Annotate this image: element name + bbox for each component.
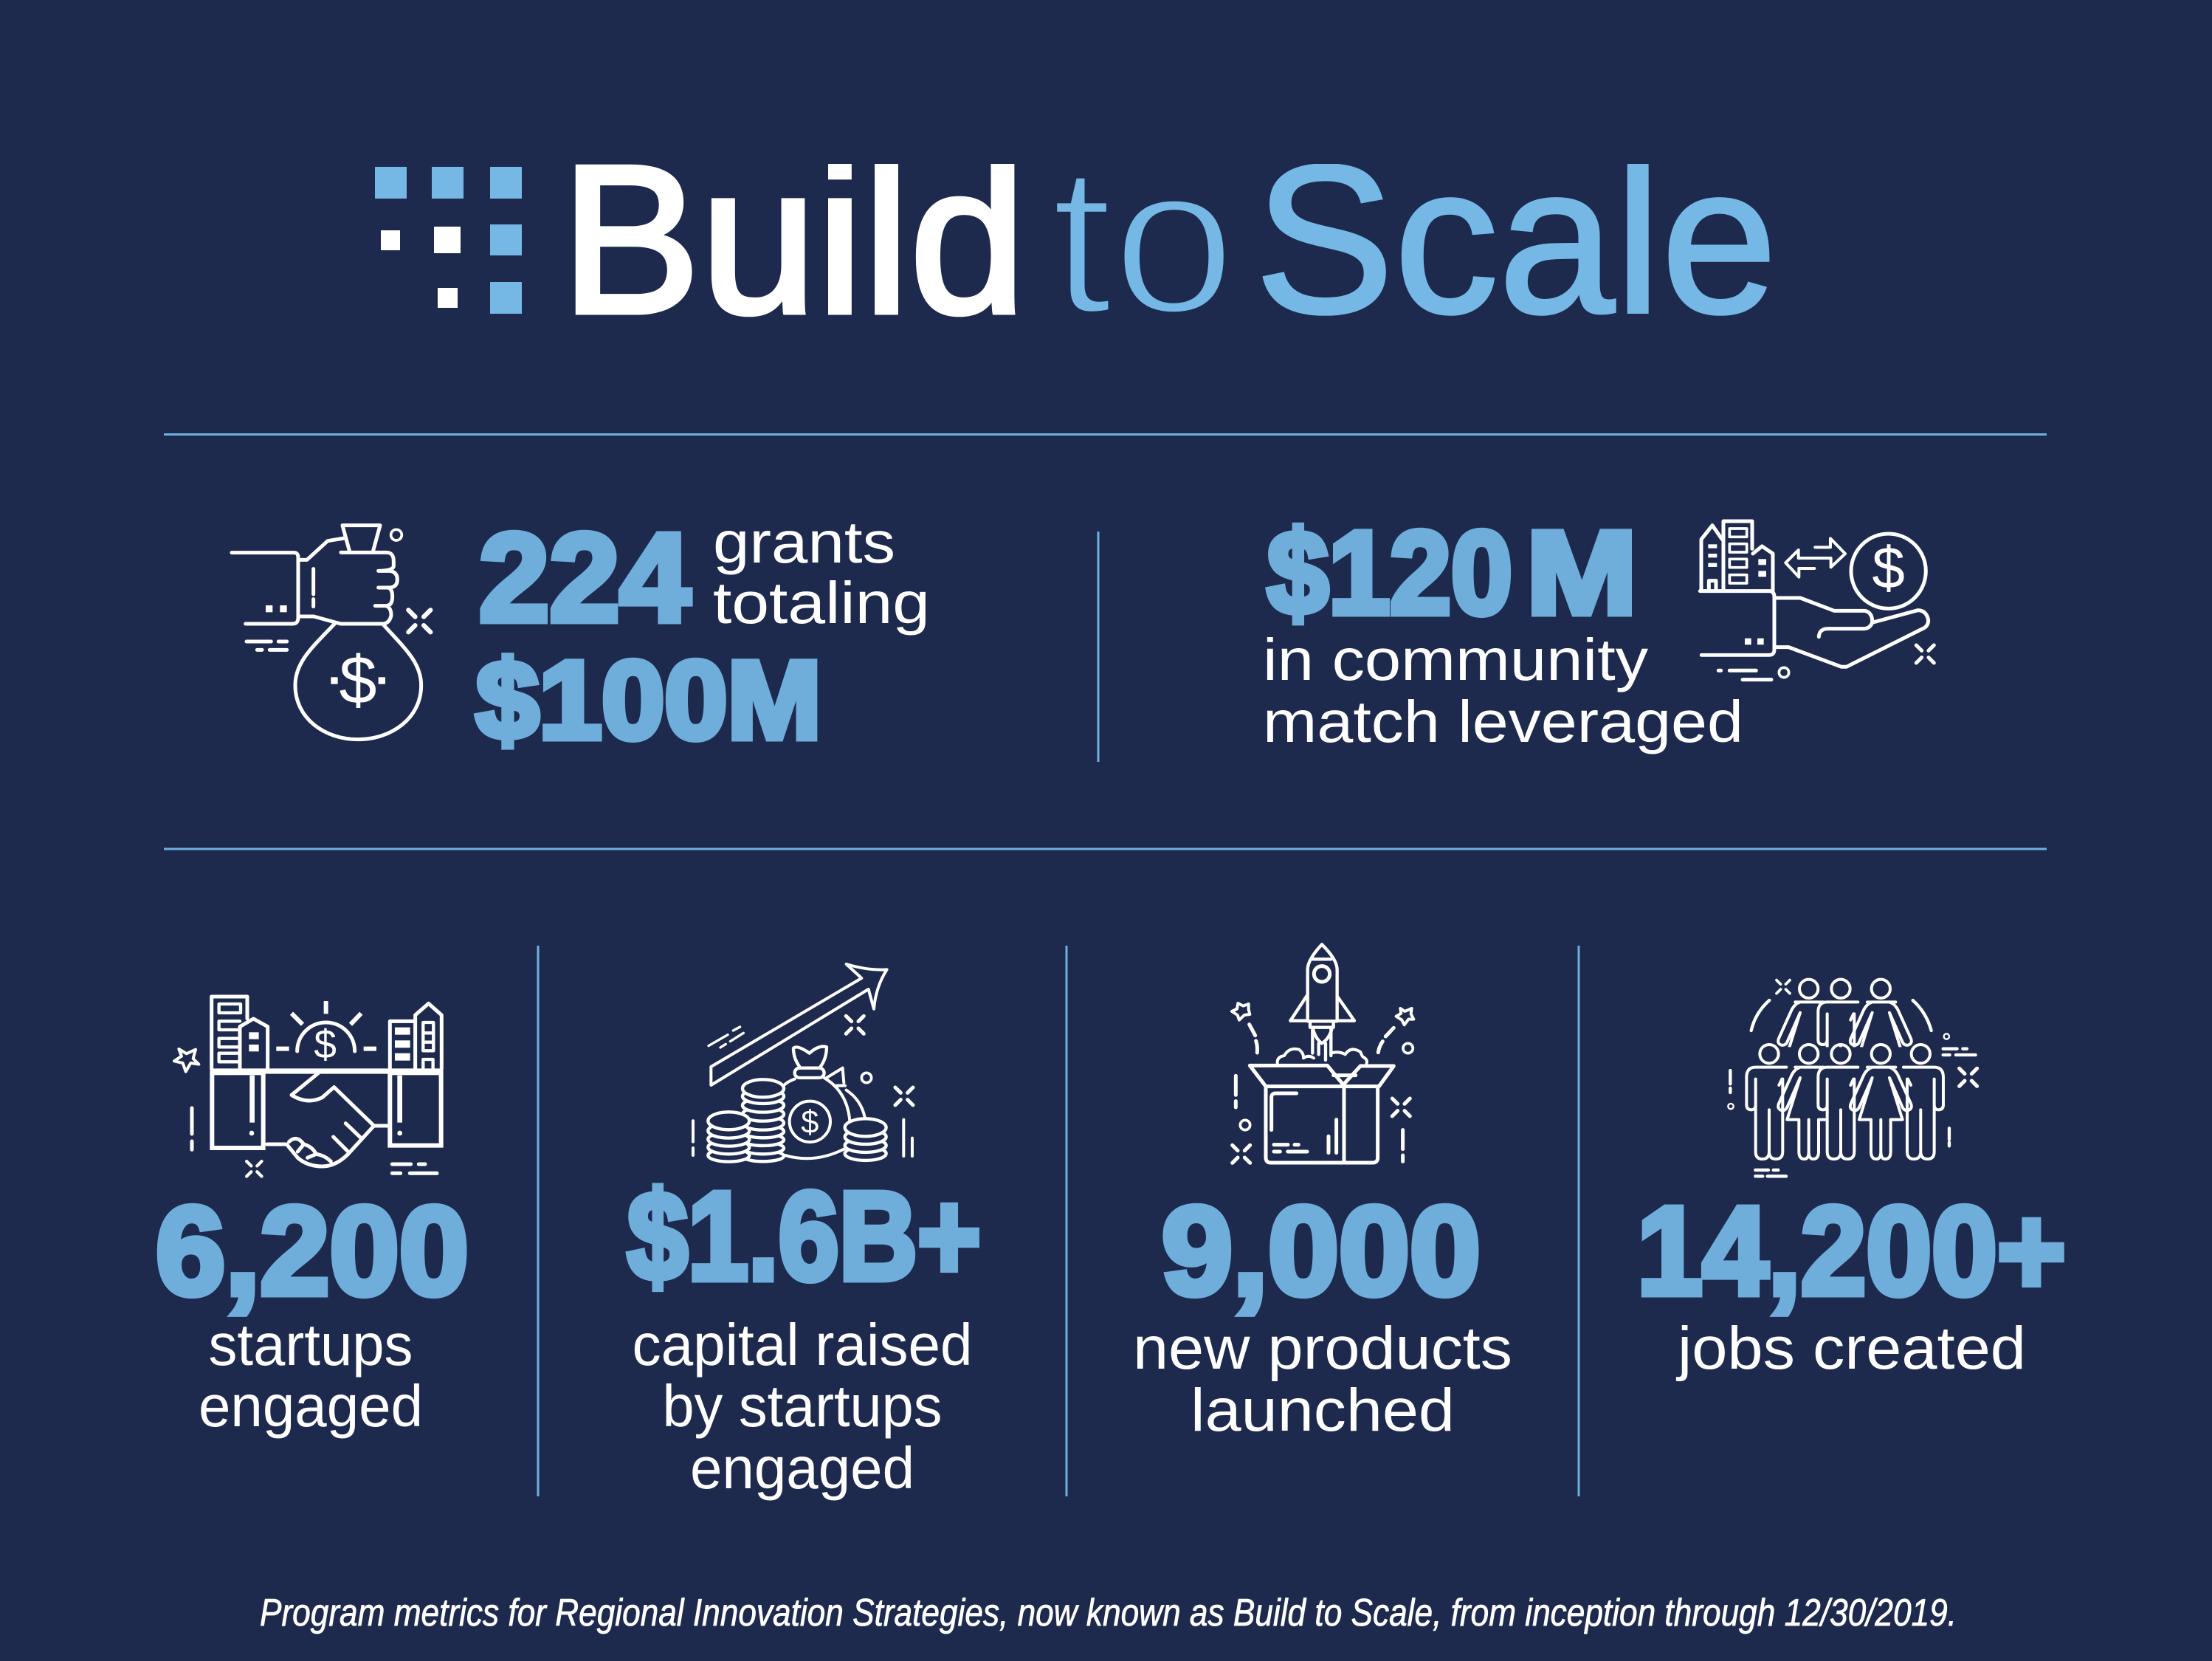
- logo mark: pixel squares: [375, 167, 522, 314]
- number: 9,000: 9,000: [1162, 1181, 1481, 1321]
- label: grants totaling: totaling: [713, 570, 930, 636]
- label: in community match leveraged: match leveraged: [1263, 689, 1743, 754]
- logo word: Scale: Scale: [1255, 121, 1777, 357]
- label: capital raised by startups engaged: by startups: [663, 1373, 942, 1439]
- label: startups engaged: [199, 1312, 423, 1439]
- label: grants totaling: [713, 509, 930, 636]
- icon: handshake with buildings: [174, 997, 443, 1177]
- label: capital raised by startups engaged: [632, 1312, 973, 1501]
- icon: money bag, coins and rising arrow: [693, 964, 913, 1162]
- number: $120M: $120: [1267, 506, 1512, 639]
- label: capital raised by startups engaged: capital raised: [632, 1312, 973, 1378]
- label: capital raised by startups engaged: engaged: [690, 1435, 914, 1501]
- panel: grants: [232, 508, 930, 762]
- label: in community match leveraged: [1263, 627, 1743, 754]
- label: new products launched: new products: [1133, 1315, 1512, 1382]
- panel: jobs created: [1637, 980, 2066, 1382]
- panel: new products: [1133, 944, 1512, 1444]
- label: grants totaling: grants: [713, 509, 895, 575]
- number: $120M: M: [1526, 506, 1637, 639]
- icon: fist holding money bag: [232, 526, 430, 740]
- footnote: Program metrics for Regional Innovation Strategies, now known as Build to Scale, from inception through 12/30/2019.: [260, 1592, 1957, 1634]
- icon: money bag, coins and rising arrow: $: [801, 1104, 819, 1140]
- label: startups engaged: engaged: [199, 1373, 423, 1439]
- number: 224: 224: [479, 508, 690, 648]
- panel: community match: [1263, 506, 1934, 754]
- icon: rocket launching from box: [1232, 944, 1413, 1163]
- number: $1.6B+: $1.6B+: [627, 1166, 981, 1307]
- icon: hand with city and coin: [1700, 521, 1934, 680]
- label: in community match leveraged: in community: [1263, 627, 1648, 692]
- icon: group of people: [1728, 980, 1977, 1176]
- logo: Build to Scale: [375, 121, 1794, 357]
- label: new products launched: [1133, 1315, 1512, 1444]
- icon: hand with city and coin: $: [1872, 535, 1905, 601]
- icon: handshake with buildings: $: [314, 1021, 337, 1067]
- logo word: to: to: [1051, 121, 1236, 357]
- icon: fist holding money bag: $: [339, 643, 376, 718]
- label: startups engaged: startups: [208, 1312, 413, 1378]
- number: 14,200+: 14,200+: [1637, 1181, 2066, 1321]
- number: $100M: $100M: [476, 638, 821, 762]
- panel: startups engaged: [156, 997, 469, 1439]
- divider lines: [164, 434, 2047, 1496]
- logo word: Build: Build: [561, 121, 1026, 357]
- label: jobs created: jobs created: [1676, 1315, 2026, 1382]
- number: 6,200: 6,200: [156, 1181, 469, 1321]
- label: new products launched: launched: [1191, 1377, 1455, 1444]
- panel: capital raised: [627, 964, 981, 1501]
